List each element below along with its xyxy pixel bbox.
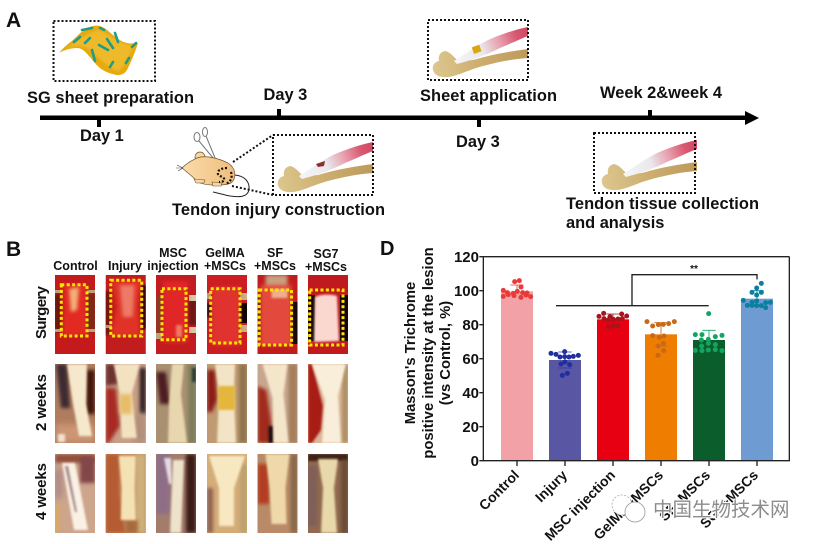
- y axis title: positive intensity at the lesion: [421, 247, 437, 459]
- significance stars: **: [690, 264, 698, 275]
- y axis ticks: 80: [462, 317, 479, 334]
- label: Sheet application: Sheet application: [420, 87, 557, 105]
- bars: [501, 291, 773, 460]
- y axis ticks: [454, 249, 479, 470]
- column headers: +MSCs: [305, 260, 347, 274]
- column headers: injection: [147, 259, 199, 273]
- y axis ticks: 120: [454, 249, 479, 266]
- photo grid: surgery row: [55, 275, 348, 354]
- panel label B: B: [6, 238, 21, 261]
- axes and ticks: [479, 257, 789, 466]
- y axis ticks: 20: [462, 419, 479, 436]
- x axis labels: [476, 467, 761, 544]
- row labels: 4 weeks: [33, 463, 50, 520]
- column headers: +MSCs: [254, 259, 296, 273]
- column headers: [53, 246, 347, 274]
- significance bracket: [556, 275, 757, 306]
- label: Week 2 and week 4: Week 2&week 4: [600, 84, 723, 102]
- label: Day 3: Day 3: [264, 86, 307, 104]
- row labels: 2 weeks: [33, 374, 50, 431]
- column headers: Injury: [108, 259, 142, 273]
- label: Tendon injury construction: Tendon injury construction: [172, 201, 385, 219]
- column headers: GelMA: [205, 246, 245, 260]
- column headers: SG7: [313, 247, 339, 261]
- x axis labels: MSC injection: [541, 467, 618, 544]
- bar chart: [479, 257, 789, 466]
- row labels: [33, 285, 50, 520]
- data points: injury: [548, 349, 581, 378]
- label: SG sheet preparation: SG sheet preparation: [27, 89, 194, 107]
- photo grid: 2 weeks row: [55, 364, 348, 443]
- label: Tendon tissue collection and analysis: Tendon tissue collection: [566, 195, 759, 213]
- x axis labels: GelMA+MSCs: [590, 467, 666, 543]
- mouse with scissors: [176, 128, 273, 197]
- label: Day 1: Day 1: [80, 127, 124, 145]
- data points: MSC injection: [596, 311, 629, 329]
- data points: SG7: [741, 281, 773, 310]
- sheet application illustration: [428, 20, 528, 80]
- label: Tendon tissue collection and analysis: and analysis: [566, 214, 664, 232]
- watermark: 中国生物技术网: [653, 499, 790, 521]
- injured tendon illustration: [273, 135, 373, 195]
- error bars: [510, 285, 764, 368]
- data points: GelMA: [644, 319, 677, 358]
- panel label A: A: [6, 9, 21, 32]
- column headers: SF: [267, 246, 283, 260]
- y axis ticks: 0: [471, 453, 479, 470]
- column headers: +MSCs: [204, 259, 246, 273]
- column headers: Control: [53, 259, 98, 273]
- watermark: [612, 495, 790, 522]
- x axis labels: Control: [476, 467, 522, 513]
- y axis ticks: 40: [462, 385, 479, 402]
- SG sheet illustration: [54, 21, 155, 81]
- photo grid: 4 weeks row: [55, 454, 348, 533]
- x axis labels: Injury: [532, 467, 570, 505]
- y axis ticks: 100: [454, 283, 479, 300]
- y axis title: Masson's Trichrome: [403, 282, 419, 424]
- panel label D: D: [380, 238, 394, 260]
- label: Day 3 second: Day 3: [456, 133, 500, 151]
- timeline arrow: [40, 109, 759, 127]
- y axis title: (vs Control, %): [438, 301, 454, 405]
- y axis title: [403, 247, 454, 459]
- x axis labels: SG7+MSCs: [697, 467, 761, 531]
- y axis ticks: 60: [462, 351, 479, 368]
- x axis labels: SF+MSCs: [656, 467, 713, 524]
- row labels: Surgery: [33, 285, 50, 339]
- label: Tendon tissue collection and analysis: [566, 195, 759, 232]
- column headers: MSC: [159, 246, 187, 260]
- data points: SF: [693, 311, 724, 353]
- data points: control: [501, 278, 533, 300]
- tissue collection illustration: [594, 133, 697, 193]
